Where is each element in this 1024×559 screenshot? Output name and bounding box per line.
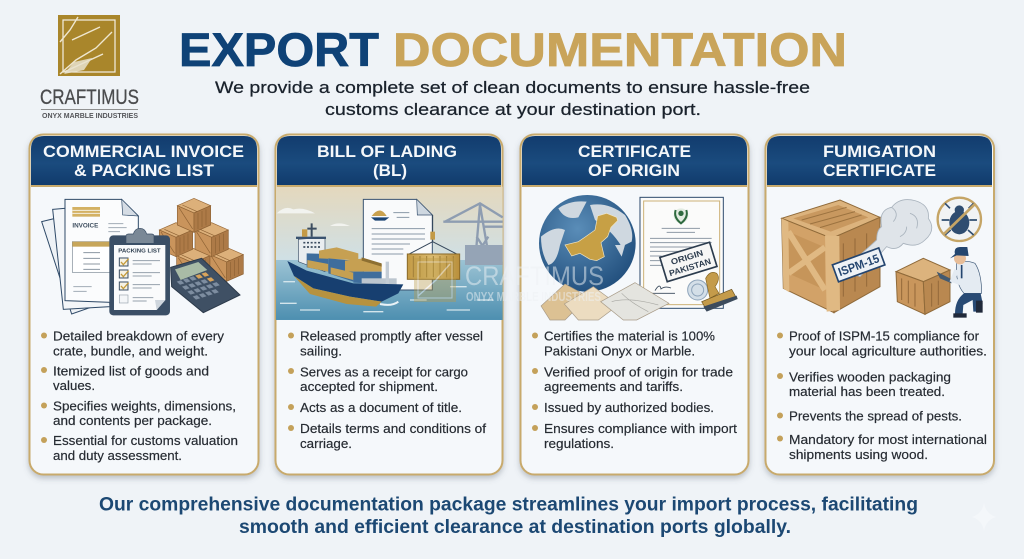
bullet list xyxy=(777,330,987,462)
footer statement: smooth and efficient clearance at destination ports globally. xyxy=(239,516,791,538)
bullet list: Issued by authorized bodies. xyxy=(544,401,714,415)
illustration: globe, certificate, marble tiles xyxy=(539,195,738,320)
packing list clipboard xyxy=(109,228,170,315)
inspector xyxy=(937,247,983,318)
port crane xyxy=(443,203,503,265)
bullet list: Released promptly after vessel xyxy=(300,330,483,344)
footer statement: Our comprehensive documentation package streamlines your import process, facilitating xyxy=(99,494,918,516)
subtitle xyxy=(215,78,810,119)
bullet list xyxy=(41,330,238,463)
large crate xyxy=(782,200,880,313)
bullet list: Itemized list of goods and xyxy=(53,364,209,378)
bullet list: values. xyxy=(53,379,95,393)
title: EXPORT xyxy=(179,23,379,76)
illustration: crates, fumigation smoke, inspector xyxy=(782,198,983,318)
panel: bill of lading xyxy=(276,134,503,474)
bullet list: sailing. xyxy=(300,344,342,358)
panel: commercial invoice and packing list xyxy=(30,134,258,474)
bullet list: shipments using wood. xyxy=(789,448,928,462)
invoice papers: INVOICE xyxy=(72,222,98,229)
watermark: Craftimus xyxy=(414,258,604,304)
bullet list: Ensures compliance with import xyxy=(544,422,738,436)
bullet list: and duty assessment. xyxy=(53,449,182,463)
title xyxy=(179,23,847,76)
bullet list: Mandatory for most international xyxy=(789,433,987,447)
bullet list: Serves as a receipt for cargo xyxy=(300,366,468,380)
bullet list: Specifies weights, dimensions, xyxy=(53,400,236,414)
bullet list: Verifies wooden packaging xyxy=(789,370,951,384)
bullet list: Details terms and conditions of xyxy=(300,422,487,436)
calculator xyxy=(171,258,240,313)
bullet list: Pakistani Onyx or Marble. xyxy=(544,344,695,358)
marble tiles xyxy=(541,283,669,320)
invoice papers xyxy=(42,199,138,314)
bullet list: Acts as a document of title. xyxy=(300,401,462,415)
bullet list: carriage. xyxy=(300,437,352,451)
bullet list: Proof of ISPM-15 compliance for xyxy=(789,330,979,344)
icon: no bugs xyxy=(938,198,981,241)
stamp: origin Pakistan: PAKISTAN xyxy=(668,256,712,278)
stamp: origin Pakistan: ORIGIN xyxy=(670,248,704,267)
bullet list: Certifies the material is 100% xyxy=(544,330,715,344)
header xyxy=(767,136,992,187)
header: FUMIGATION xyxy=(823,142,936,161)
bullet list: Prevents the spread of pests. xyxy=(789,410,962,424)
logo: Craftimus xyxy=(40,15,139,120)
bullet list: Verified proof of origin for trade xyxy=(544,366,733,380)
bullet list: Essential for customs valuation xyxy=(53,434,238,448)
sky and sea xyxy=(276,187,503,320)
bullet list: regulations. xyxy=(544,437,614,451)
watermark: Craftimus: ONYX MARBLE INDUSTRIES xyxy=(466,289,601,304)
globe with Pakistan xyxy=(539,195,636,292)
waves xyxy=(280,282,493,312)
bullet list: agreements and tariffs. xyxy=(544,380,683,394)
bullet list: material has been treated. xyxy=(789,385,945,399)
illustration: cargo ship and port xyxy=(276,187,503,320)
bullet list xyxy=(288,330,487,451)
header: OF ORIGIN xyxy=(588,161,680,180)
header: (BL) xyxy=(373,161,407,180)
subtitle: We provide a complete set of clean documents to ensure hassle-free xyxy=(215,78,810,97)
packing list clipboard: PACKING LIST xyxy=(118,248,161,254)
hanging container xyxy=(407,215,460,279)
bullet list: accepted for shipment. xyxy=(300,380,438,394)
header xyxy=(522,136,747,187)
panel: certificate of origin xyxy=(520,134,748,474)
certificate document xyxy=(640,197,723,308)
subtitle: customs clearance at your destination port. xyxy=(325,100,701,119)
bullet list: Detailed breakdown of every xyxy=(53,330,225,344)
title: DOCUMENTATION xyxy=(393,23,847,76)
header: CERTIFICATE xyxy=(823,161,936,180)
watermark: Craftimus: CRAFTIMUS xyxy=(465,261,604,291)
crates xyxy=(159,198,243,282)
header: CERTIFICATE xyxy=(578,142,691,161)
header xyxy=(277,136,501,187)
illustration: documents, clipboard, crates, calculator xyxy=(42,198,243,315)
ISPM-15 label: ISPM-15 xyxy=(836,251,881,279)
icon: sparkle xyxy=(972,503,996,531)
bullet list: and contents per package. xyxy=(53,414,212,428)
bullet list xyxy=(532,330,738,451)
header: BILL OF LADING xyxy=(317,142,457,161)
wordmark: CRAFTIMUS xyxy=(40,86,139,109)
header xyxy=(31,136,257,187)
header: & PACKING LIST xyxy=(74,161,215,180)
header: COMMERCIAL INVOICE xyxy=(43,142,244,161)
rubber stamp xyxy=(702,272,738,312)
small crate xyxy=(896,258,950,314)
icon: gold marble square xyxy=(58,15,120,76)
bullet list: crate, bundle, and weight. xyxy=(53,344,208,358)
footer statement xyxy=(99,494,918,538)
panel: fumigation certificate xyxy=(766,134,994,474)
cargo ship xyxy=(287,223,403,307)
bullet list: your local agriculture authorities. xyxy=(789,344,987,358)
bill of lading document xyxy=(363,199,432,290)
fumigation smoke xyxy=(843,200,932,277)
tagline: ONYX MARBLE INDUSTRIES xyxy=(42,113,138,120)
stamp: origin Pakistan xyxy=(660,242,717,282)
